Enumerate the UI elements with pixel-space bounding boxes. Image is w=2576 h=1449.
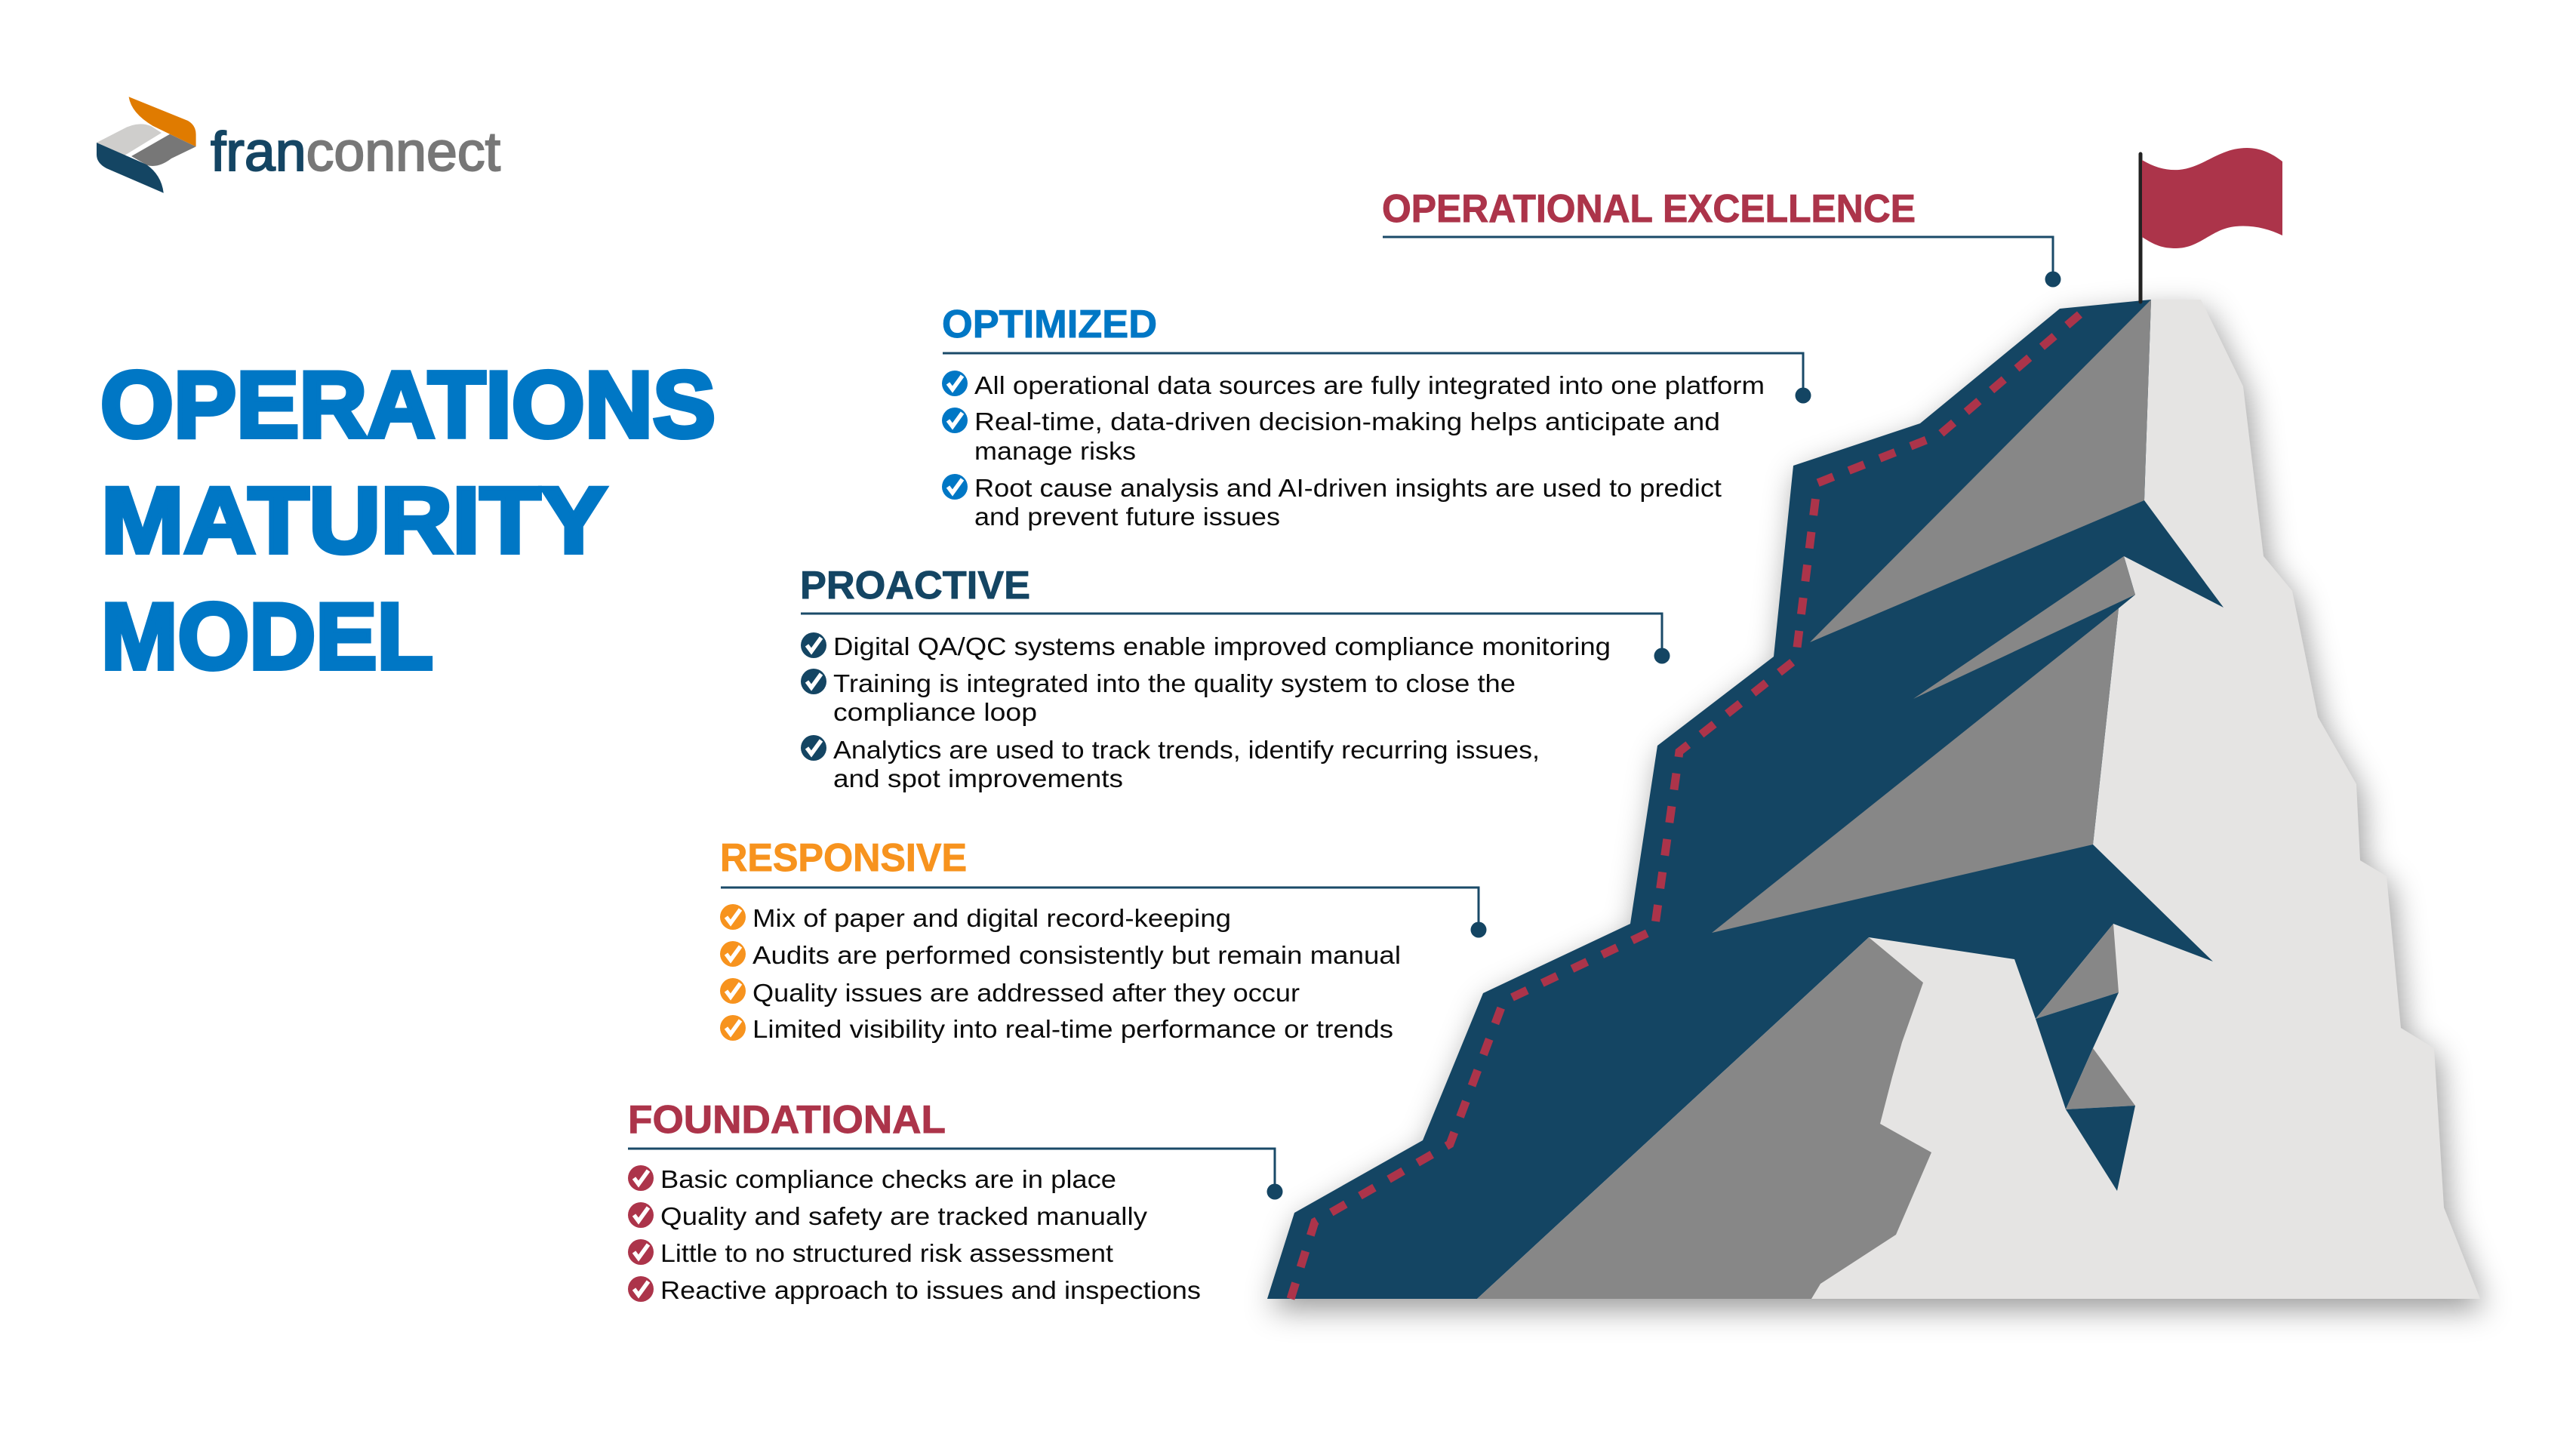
item: training: Training is integrated into the quality system to close the [833, 669, 1516, 697]
panel: proactive [800, 564, 1670, 792]
item: audits: Audits are performed consistently but remain manual [752, 941, 1401, 969]
item: data sources: All operational data sources are fully integrated into one platform [974, 371, 1765, 399]
gray face lower [1477, 937, 1931, 1299]
gray small triangle [2066, 1048, 2135, 1109]
title: MATURITY [101, 469, 607, 573]
item: decision-making [942, 408, 1720, 465]
navy point [2066, 1106, 2135, 1191]
item: basic compliance: Basic compliance checks are in place [660, 1165, 1116, 1193]
item: digital QA/QC: Digital QA/QC systems enable improved compliance monitoring [833, 632, 1611, 660]
item: decision-making: manage risks [974, 437, 1136, 465]
heading: OPERATIONAL EXCELLENCE [1382, 187, 1916, 231]
panel: optimized [942, 303, 1811, 531]
gray sliver [1913, 556, 2135, 699]
dashed climbing path [1291, 310, 2085, 1299]
logo wordmark: franconnect [211, 122, 500, 183]
flag pole [2139, 154, 2142, 302]
item: training [801, 669, 1516, 726]
title [100, 353, 716, 689]
gray face upper [1810, 300, 2151, 642]
heading: RESPONSIVE [720, 836, 967, 880]
leader line [721, 888, 1487, 937]
item: limited visibility: Limited visibility into real-time performance or trends [752, 1015, 1393, 1043]
gray triangle [2036, 924, 2119, 1019]
panel: operational excellence [1382, 187, 2060, 287]
item: root cause [942, 474, 1722, 531]
leader line [801, 614, 1670, 664]
item: analytics [801, 735, 1540, 792]
item: analytics: Analytics are used to track trends, identify recurring issues, [833, 736, 1540, 764]
item: root cause: and prevent future issues [974, 503, 1280, 531]
item: quality and safety: Quality and safety are tracked manually [660, 1202, 1148, 1230]
mountain illustration [1267, 148, 2480, 1299]
leader line [943, 353, 1811, 403]
item: risk assessment: Little to no structured risk assessment [660, 1239, 1113, 1267]
logo: franconnect [97, 97, 500, 193]
leader line [1383, 237, 2060, 287]
item: analytics: and spot improvements [833, 764, 1123, 792]
panel: responsive [720, 836, 1487, 1043]
mountain silhouette [1267, 300, 2480, 1299]
navy shard [2036, 992, 2119, 1109]
item: decision-making: Real-time, data-driven decision-making helps anticipate and [974, 408, 1720, 435]
heading: PROACTIVE [800, 564, 1030, 608]
gray face middle [1712, 608, 2119, 933]
flag [2142, 148, 2282, 248]
item: training: compliance loop [833, 698, 1037, 726]
item: paper and digital: Mix of paper and digital record-keeping [752, 904, 1231, 932]
item: root cause: Root cause analysis and AI-driven insights are used to predict [974, 474, 1722, 502]
logo mark [97, 97, 196, 193]
heading: FOUNDATIONAL [628, 1098, 946, 1142]
panel: foundational [628, 1098, 1283, 1304]
item: quality issues: Quality issues are addressed after they occur [752, 979, 1300, 1007]
title: MODEL [101, 585, 433, 689]
item: reactive approach: Reactive approach to issues and inspections [660, 1276, 1201, 1304]
heading: OPTIMIZED [942, 303, 1157, 346]
leader line [628, 1149, 1283, 1200]
title: OPERATIONS [100, 353, 716, 457]
navy ridge [1267, 300, 2224, 1299]
